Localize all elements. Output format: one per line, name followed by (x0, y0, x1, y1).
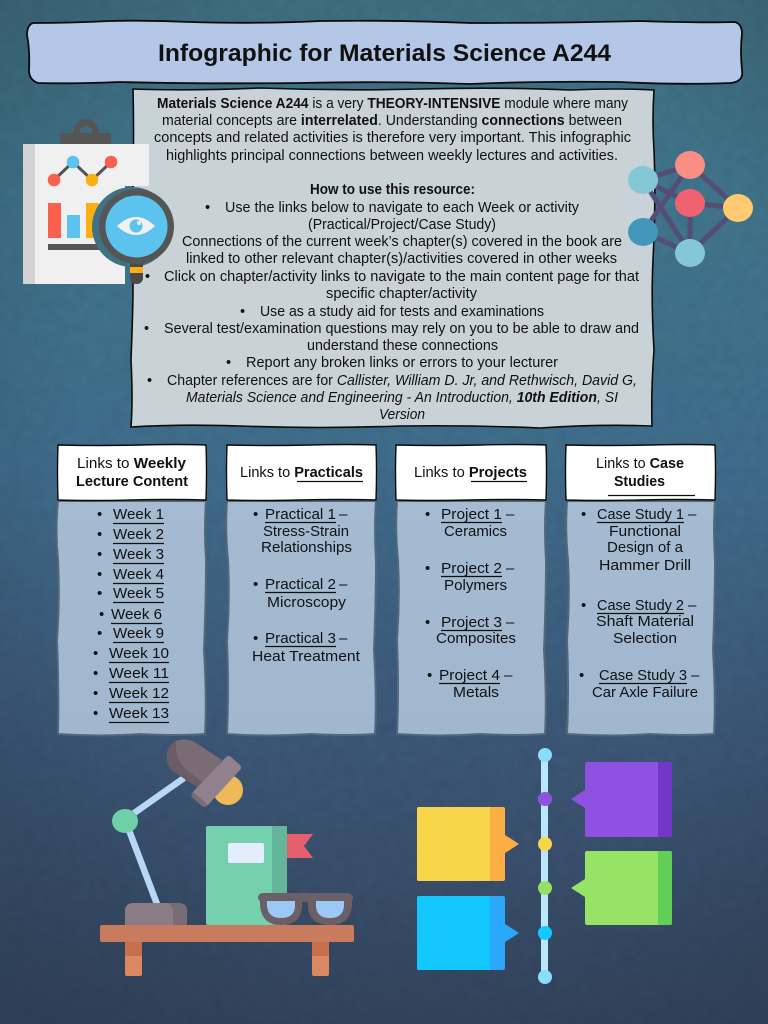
week list: • (97, 625, 102, 642)
practicals list: Relationships (261, 539, 352, 556)
icon: timeline with speech boxes (417, 748, 672, 984)
how to use list: • (144, 321, 149, 337)
week list: Week 3 (113, 546, 164, 563)
icon: network of nodes (628, 151, 753, 267)
how to use list: Version (379, 407, 425, 423)
case studies list: Selection (613, 630, 677, 647)
projects list: – (506, 614, 515, 631)
practicals list: • (253, 506, 258, 523)
practicals list: – (339, 506, 348, 523)
box: yellow (417, 807, 519, 881)
case studies list: Functional (609, 523, 681, 540)
practicals list: Practical 1 (265, 506, 336, 523)
week list: Week 5 (113, 585, 164, 602)
how to use list: • (205, 200, 210, 216)
case studies list: Case Study 2 (597, 597, 684, 614)
week list (93, 506, 169, 722)
practicals list: – (339, 576, 348, 593)
case studies list: Case Study 3 (599, 667, 687, 684)
box: green (571, 851, 672, 925)
projects list: Project 1 (441, 506, 502, 523)
how to use list: linked to other relevant chapter(s)/activities covered in other weeks (186, 251, 617, 267)
projects list: – (506, 560, 515, 577)
case studies list: • (581, 506, 586, 523)
week list: Week 1 (113, 506, 164, 523)
case studies list: Design of a (607, 539, 684, 556)
header: case studies: Links to Case (596, 455, 684, 472)
how to use list: • (147, 373, 152, 389)
how to use list: • (145, 269, 150, 285)
how to use list: understand these connections (307, 338, 498, 354)
title text: Infographic for Materials Science A244 (158, 40, 612, 67)
practicals list: Heat Treatment (252, 648, 361, 665)
header: weekly lecture: Links to Weekly (77, 455, 187, 472)
week list: • (97, 566, 102, 583)
week list: Week 2 (113, 526, 164, 543)
how to use list: How to use this resource: (310, 182, 475, 198)
icon: lamp (112, 739, 243, 925)
how to use list: • (226, 355, 231, 371)
projects list: Composites (436, 630, 516, 647)
how to use list: Use the links below to navigate to each Week or activity (225, 200, 580, 216)
projects list: – (506, 506, 515, 523)
projects list: Polymers (444, 577, 507, 594)
icon: desk lamp on shelf with book and glasses (100, 739, 354, 976)
week list: • (93, 645, 98, 662)
practicals list: Stress-Strain (263, 523, 349, 540)
box: blue (417, 896, 519, 970)
intro paragraph: material concepts are interrelated. Understanding connections between (162, 113, 622, 129)
projects list: • (425, 506, 430, 523)
week list: Week 12 (109, 685, 169, 702)
week list: • (93, 685, 98, 702)
how to use list: Use as a study aid for tests and examinations (260, 304, 544, 320)
practicals list: • (253, 576, 258, 593)
week list: Week 11 (109, 665, 169, 682)
header: case studies (566, 444, 716, 500)
how to use list: Report any broken links or errors to your lecturer (246, 355, 558, 371)
week list: • (99, 606, 104, 623)
header: projects (396, 444, 546, 500)
case studies list: Case Study 1 (597, 506, 684, 523)
projects list: • (427, 667, 432, 684)
case studies list: Shaft Material (596, 613, 694, 630)
header: practicals (226, 444, 376, 500)
icon: shelf (100, 925, 354, 976)
projects list: Project 3 (441, 614, 502, 631)
how to use list: • (240, 304, 245, 320)
case studies list: – (688, 597, 697, 614)
week list: • (93, 705, 98, 722)
practicals list (252, 506, 361, 665)
intro paragraph: Materials Science A244 is a very THEORY-INTENSIVE module where many (157, 96, 629, 112)
week list: • (97, 546, 102, 563)
case studies list: Car Axle Failure (592, 684, 698, 701)
week list: Week 10 (109, 645, 169, 662)
case studies list: • (581, 597, 586, 614)
box: purple (571, 762, 672, 837)
case studies list: • (579, 667, 584, 684)
how to use list (144, 182, 639, 423)
how to use list: (Practical/Project/Case Study) (308, 217, 496, 233)
week list: • (93, 665, 98, 682)
week list: • (97, 526, 102, 543)
case studies list: – (691, 667, 700, 684)
icon: clipboard with charts and magnifier (23, 122, 174, 284)
week list: Week 9 (113, 625, 164, 642)
projects list: • (425, 560, 430, 577)
case studies list (579, 506, 700, 701)
projects list: Project 2 (441, 560, 502, 577)
practicals list: Practical 3 (265, 630, 336, 647)
header: weekly lecture: Lecture Content (76, 473, 188, 490)
projects list: Project 4 (439, 667, 500, 684)
how to use list: Several test/examination questions may rely on you to be able to draw and (164, 321, 639, 337)
timeline axis (538, 748, 552, 984)
case studies list: Hammer Drill (599, 557, 691, 574)
projects list: • (425, 614, 430, 631)
header: weekly lecture (58, 444, 206, 500)
week list: Week 6 (111, 606, 162, 623)
header: case studies: Studies (614, 473, 665, 490)
icon: book (206, 826, 313, 925)
intro paragraph: highlights principal connections between weekly lectures and activities. (166, 148, 618, 164)
projects list (425, 506, 516, 701)
panel: practicals links (226, 444, 376, 736)
header: projects: Links to Projects (414, 464, 527, 481)
week list: • (97, 506, 102, 523)
title banner (27, 21, 742, 84)
practicals list: – (339, 630, 348, 647)
projects list: Ceramics (444, 523, 507, 540)
how to use list: specific chapter/activity (326, 286, 478, 302)
panel: introduction (131, 88, 655, 428)
week list: Week 4 (113, 566, 164, 583)
panel: projects links (396, 444, 546, 736)
practicals list: Microscopy (267, 594, 347, 611)
panel: weekly lecture links (56, 444, 206, 736)
case studies list: – (688, 506, 697, 523)
how to use list: Chapter references are for Callister, William D. Jr, and Rethwisch, David G, (167, 373, 637, 389)
how to use list: Connections of the current week’s chapter(s) covered in the book are (182, 234, 622, 250)
projects list: Metals (453, 684, 499, 701)
intro paragraph: concepts and related activities is therefore very important. This infographic (154, 130, 631, 146)
icon: glasses (258, 893, 353, 925)
practicals list: • (253, 630, 258, 647)
panel: case studies links (566, 444, 716, 736)
how to use list: Click on chapter/activity links to navigate to the main content page for that (164, 269, 639, 285)
header: practicals: Links to Practicals (240, 464, 363, 481)
how to use list: Materials Science and Engineering - An Introduction, 10th Edition, SI (186, 390, 618, 406)
projects list: – (504, 667, 513, 684)
intro paragraph (154, 96, 631, 164)
practicals list: Practical 2 (265, 576, 336, 593)
week list: Week 13 (109, 705, 169, 722)
week list: • (97, 585, 102, 602)
